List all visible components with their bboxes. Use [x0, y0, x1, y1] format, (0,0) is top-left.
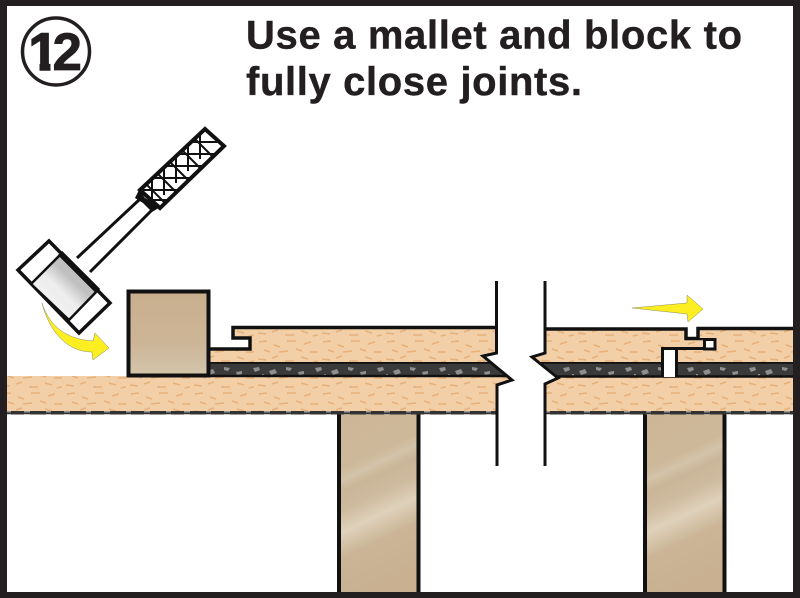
step number badge	[22, 18, 90, 85]
top floorboard right, adjacent piece with groove	[676, 328, 793, 362]
underlayment right section	[538, 362, 793, 376]
mallet head	[18, 241, 110, 333]
break line left	[483, 281, 512, 466]
top floorboard left with tongue	[210, 327, 495, 362]
joist left	[339, 412, 418, 598]
top floorboard right, left piece	[532, 329, 703, 362]
break line right	[532, 281, 558, 466]
heading	[246, 14, 742, 104]
heading: fully close joints.	[246, 60, 582, 104]
icon: mallet	[18, 120, 232, 333]
subfloor right section	[545, 376, 793, 414]
heading: Use a mallet and block to	[246, 14, 742, 58]
step number badge: 2	[52, 23, 82, 82]
subfloor left section	[7, 376, 512, 414]
underlayment left section	[210, 362, 507, 376]
joist right	[645, 412, 724, 598]
step number badge: 1	[28, 23, 58, 82]
arrow: swing direction	[42, 303, 109, 360]
expansion gap and joint opening	[662, 340, 715, 377]
mallet handle	[77, 199, 152, 272]
mallet grip	[135, 126, 227, 212]
arrow: joint closing direction	[632, 295, 703, 322]
wood block	[128, 292, 208, 376]
